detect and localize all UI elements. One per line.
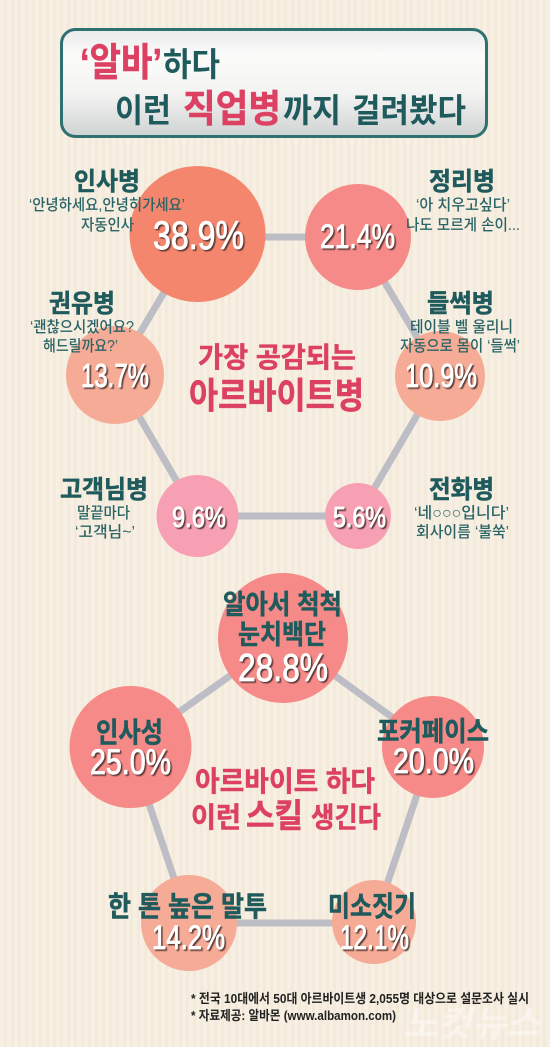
circle: 전화병 5.6% (325, 483, 391, 549)
circle: 인사병 38.9% (130, 166, 266, 302)
heading: 아르바이트 하다 이런 스킬 생긴다: 생긴다 (311, 802, 381, 833)
title box: ‘알바’ (80, 42, 162, 85)
heading: 아르바이트 하다 이런 스킬 생긴다 (191, 766, 381, 834)
heading: 아르바이트 하다 이런 스킬 생긴다: 스킬 (246, 797, 303, 834)
label: 인사병: 자동인사 (81, 216, 134, 234)
label: 인사병: ‘안녕하세요,안녕히가세요’ (29, 196, 185, 214)
hexagon chart: part-time job ailments (66, 166, 485, 557)
label: 고객님병: 말끝마다 (77, 504, 130, 522)
circle: 알아서 척척 눈치백단 28.8%: 알아서 척척 (223, 590, 342, 620)
circle: 미소짓기 12.1% (328, 880, 416, 964)
label: 전화병: 전화병 (429, 476, 494, 504)
title box: 직업병 (183, 89, 281, 131)
circle: 들썩병 10.9%: 10.9% (405, 357, 477, 394)
heading: 가장 공감되는 아르바이트병 (189, 342, 364, 416)
circle: 권유병 13.7% (66, 326, 164, 424)
circle: 포커페이스 20.0%: 20.0% (393, 742, 474, 781)
circle: 알아서 척척 눈치백단 28.8%: 28.8% (238, 647, 328, 690)
watermark: 노컷뉴스 (403, 1003, 542, 1044)
circle: 전화병 5.6%: 5.6% (333, 502, 386, 534)
circle: 미소짓기 12.1%: 미소짓기 (328, 891, 416, 922)
circle: 권유병 13.7%: 13.7% (81, 357, 149, 394)
footnote: survey source (191, 991, 529, 1023)
label: 정리병: 나도 모르게 손이... (406, 216, 520, 234)
title box: 까지 (283, 92, 341, 129)
circle: 인사성 25.0%: 인사성 (96, 717, 163, 748)
title box: 하다 (163, 46, 220, 83)
circle: 인사성 25.0%: 25.0% (90, 743, 171, 782)
label: 정리병: 정리병 (429, 168, 495, 196)
label: 들썩병: 들썩병 (427, 290, 494, 318)
heading: 가장 공감되는 아르바이트병: 아르바이트병 (189, 375, 364, 416)
pentagon chart: skills gained (70, 573, 489, 971)
title box (62, 30, 486, 136)
heading: 아르바이트 하다 이런 스킬 생긴다: 아르바이트 하다 (195, 766, 375, 797)
label: 고객님병: ‘고객님~’ (75, 523, 135, 541)
label: 권유병 (30, 290, 134, 355)
circle: 포커페이스 20.0% (377, 696, 489, 798)
footnote: survey source: * 자료제공: 알바몬 (www.albamon.com) (191, 1008, 396, 1023)
circle: 알아서 척척 눈치백단 28.8%: 눈치백단 (238, 620, 326, 650)
circle: 고객님병 9.6% (156, 475, 238, 557)
circle: 한 톤 높은 말투 14.2% (108, 875, 267, 971)
circle: 정리병 21.4%: 21.4% (320, 218, 395, 256)
label: 고객님병: 고객님병 (60, 476, 148, 504)
label: 전화병 (414, 476, 509, 541)
circle: 정리병 21.4% (305, 184, 411, 290)
label: 고객님병 (60, 476, 148, 541)
label: 권유병: 해드릴까요?’ (43, 337, 118, 355)
label: 정리병: ‘아 치우고싶다’ (416, 196, 510, 214)
circle: 고객님병 9.6%: 9.6% (172, 502, 226, 534)
label: 권유병: ‘괜찮으시겠어요? (30, 318, 134, 336)
heading: 아르바이트 하다 이런 스킬 생긴다: 이런 (191, 802, 241, 833)
label: 들썩병 (400, 290, 520, 355)
circle: 인사성 25.0% (70, 686, 192, 808)
label: 들썩병: 테이블 벨 울리니 (410, 318, 513, 336)
circle: 한 톤 높은 말투 14.2%: 한 톤 높은 말투 (108, 891, 267, 922)
label: 전화병: 회사이름 ‘불쑥’ (416, 523, 509, 541)
heading: 가장 공감되는 아르바이트병: 가장 공감되는 (198, 342, 356, 373)
circle: 들썩병 10.9% (395, 331, 485, 421)
circle: 미소짓기 12.1%: 12.1% (340, 919, 409, 957)
circle: 알아서 척척 눈치백단 28.8% (218, 573, 348, 703)
label: 전화병: ‘네○○○입니다’ (414, 504, 509, 522)
label: 권유병: 권유병 (49, 290, 115, 318)
label: 인사병 (29, 168, 185, 234)
circle: 인사병 38.9%: 38.9% (153, 214, 244, 258)
label: 들썩병: 자동으로 몸이 ‘들썩’ (400, 337, 520, 355)
title box: 걸려봤다 (352, 92, 466, 129)
label: 정리병 (406, 168, 520, 234)
label: 인사병: 인사병 (74, 168, 140, 196)
title box: 이런 (115, 92, 171, 129)
circle: 포커페이스 20.0%: 포커페이스 (377, 717, 489, 747)
circle: 한 톤 높은 말투 14.2%: 14.2% (152, 919, 225, 957)
